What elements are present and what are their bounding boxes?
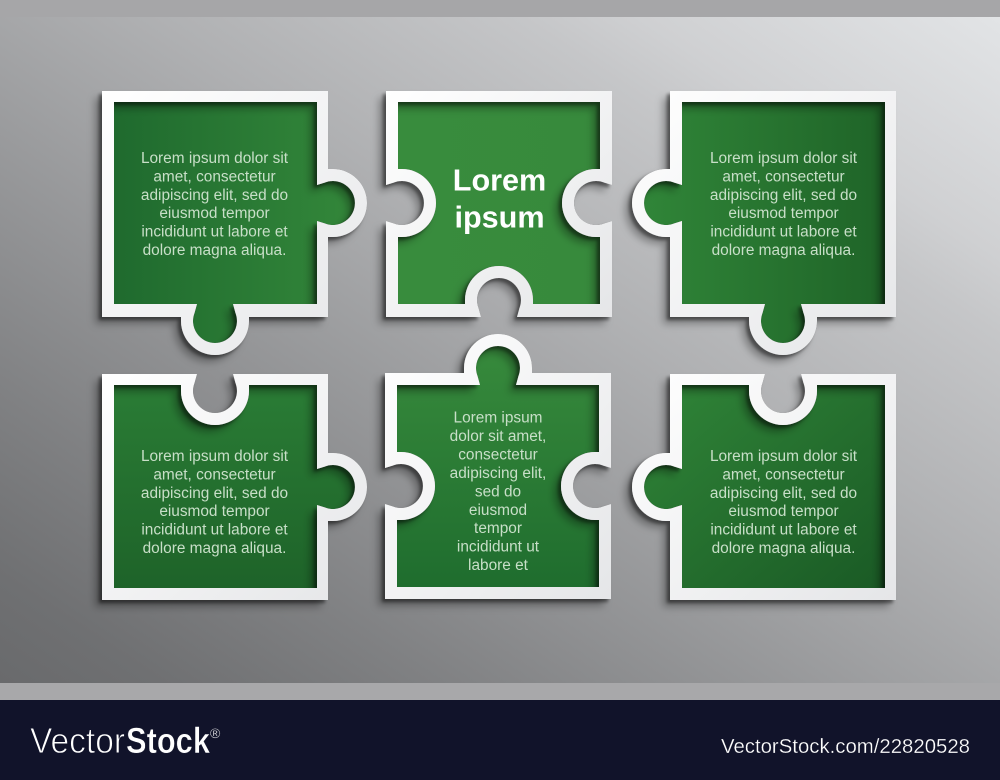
heading: Lorem ipsum bbox=[453, 164, 546, 234]
text: top-right piece: adipiscing elit, sed do bbox=[710, 187, 857, 204]
text: top-left piece: dolore magna aliqua. bbox=[143, 242, 286, 259]
text: top-right piece bbox=[710, 150, 858, 259]
text: top-left piece bbox=[141, 150, 289, 259]
text: bottom-centre piece: consectetur bbox=[458, 446, 538, 463]
text: bottom-left piece: eiusmod tempor bbox=[159, 503, 270, 520]
text: bottom-centre piece: adipiscing elit, bbox=[450, 465, 546, 482]
text: bottom-right piece: dolore magna aliqua. bbox=[712, 540, 855, 557]
text: bottom-right piece: amet, consectetur bbox=[722, 466, 845, 483]
text: top-right piece: eiusmod tempor bbox=[728, 205, 839, 222]
panel: bottom-centre puzzle piece bbox=[385, 334, 611, 599]
text: bottom-right piece: adipiscing elit, sed do bbox=[710, 485, 857, 502]
heading: Lorem ipsum: Lorem bbox=[453, 164, 546, 198]
text: bottom-left piece: adipiscing elit, sed do bbox=[141, 485, 288, 502]
text: top-right piece: amet, consectetur bbox=[722, 168, 845, 185]
text: top-left piece: Lorem ipsum dolor sit bbox=[141, 150, 289, 167]
panel: bottom-right puzzle piece bbox=[632, 374, 896, 600]
top strip bbox=[0, 0, 1000, 17]
panel: top-centre puzzle piece bbox=[386, 91, 612, 317]
text: bottom-centre piece: sed do bbox=[475, 483, 521, 500]
text: bottom-centre piece: incididunt ut bbox=[457, 539, 540, 556]
bottom strip bbox=[0, 683, 1000, 700]
text: top-left piece: incididunt ut labore et bbox=[141, 224, 288, 241]
text: bottom-left piece: amet, consectetur bbox=[153, 466, 276, 483]
text: bottom-centre piece: eiusmod bbox=[469, 502, 527, 519]
logo: VectorStock: Stock bbox=[126, 720, 211, 761]
text: bottom-right piece: Lorem ipsum dolor sit bbox=[710, 448, 858, 465]
text: top-left piece: amet, consectetur bbox=[153, 168, 276, 185]
text: bottom-left piece: Lorem ipsum dolor sit bbox=[141, 448, 289, 465]
text: bottom-centre piece: tempor bbox=[474, 520, 522, 537]
text: top-right piece: Lorem ipsum dolor sit bbox=[710, 150, 858, 167]
text: top-left piece: adipiscing elit, sed do bbox=[141, 187, 288, 204]
text: top-right piece: dolore magna aliqua. bbox=[712, 242, 855, 259]
text: bottom-centre piece: Lorem ipsum bbox=[454, 410, 542, 426]
text: bottom-right piece: incididunt ut labore et bbox=[710, 522, 857, 539]
footer id: VectorStock.com/22820528: VectorStock.com/22820528 bbox=[721, 736, 970, 758]
text: bottom-centre piece: dolor sit amet, bbox=[450, 428, 546, 445]
text: bottom-right piece: eiusmod tempor bbox=[728, 503, 839, 520]
panel: top-left puzzle piece bbox=[102, 91, 367, 355]
text: bottom-left piece: incididunt ut labore et bbox=[141, 522, 288, 539]
panel: top-right puzzle piece bbox=[632, 91, 896, 355]
text: bottom-centre piece bbox=[450, 410, 546, 574]
text: bottom-right piece bbox=[710, 448, 858, 557]
text: bottom-left piece bbox=[141, 448, 289, 557]
text: top-right piece: incididunt ut labore et bbox=[710, 224, 857, 241]
text: bottom-centre piece: labore et bbox=[468, 557, 529, 574]
panel: bottom-left puzzle piece bbox=[102, 374, 367, 600]
footer bar bbox=[0, 700, 1000, 780]
text: bottom-left piece: dolore magna aliqua. bbox=[143, 540, 286, 557]
heading: Lorem ipsum: ipsum bbox=[454, 200, 545, 234]
text: top-left piece: eiusmod tempor bbox=[159, 205, 270, 222]
logo: VectorStock bbox=[30, 720, 221, 761]
logo: VectorStock: Vector bbox=[30, 720, 125, 761]
logo: VectorStock: ® bbox=[210, 725, 221, 741]
